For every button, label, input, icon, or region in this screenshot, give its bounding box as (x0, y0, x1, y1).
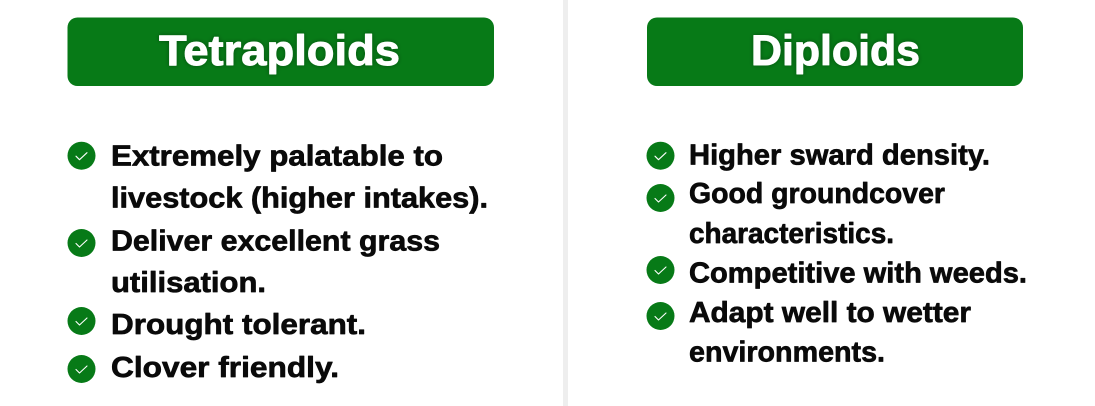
list item: groundcover (646, 178, 945, 250)
list item: groundcover: Good groundcover (689, 178, 945, 210)
list item: grass utilisation: Deliver excellent grass (111, 226, 440, 258)
list item: extremely palatable (68, 140, 488, 214)
list item: drought tolerant: Drought tolerant. (111, 309, 366, 341)
heading: diploids (647, 18, 1023, 86)
panel: diploids (646, 18, 1027, 368)
list item: extremely palatable: Extremely palatable to (111, 140, 443, 172)
list item: wetter environments (646, 297, 971, 368)
list item: wetter environments: Adapt well to wetter (689, 297, 971, 329)
heading: diploids: Diploids (751, 27, 920, 75)
list item: groundcover: characteristics. (689, 218, 894, 250)
list item: extremely palatable: livestock (higher intakes). (111, 182, 488, 214)
list item: clover friendly: Clover friendly. (111, 352, 339, 384)
list item: grass utilisation: utilisation. (111, 267, 266, 299)
heading: tetraploids: Tetraploids (159, 27, 400, 75)
list item: wetter environments: environments. (689, 336, 885, 368)
list item: sward density: Higher sward density. (689, 140, 990, 172)
heading: tetraploids (68, 18, 494, 86)
panel: tetraploids (68, 18, 494, 384)
list item: grass utilisation (68, 226, 440, 299)
list item: competitive with weeds: Competitive with weeds. (689, 258, 1027, 290)
